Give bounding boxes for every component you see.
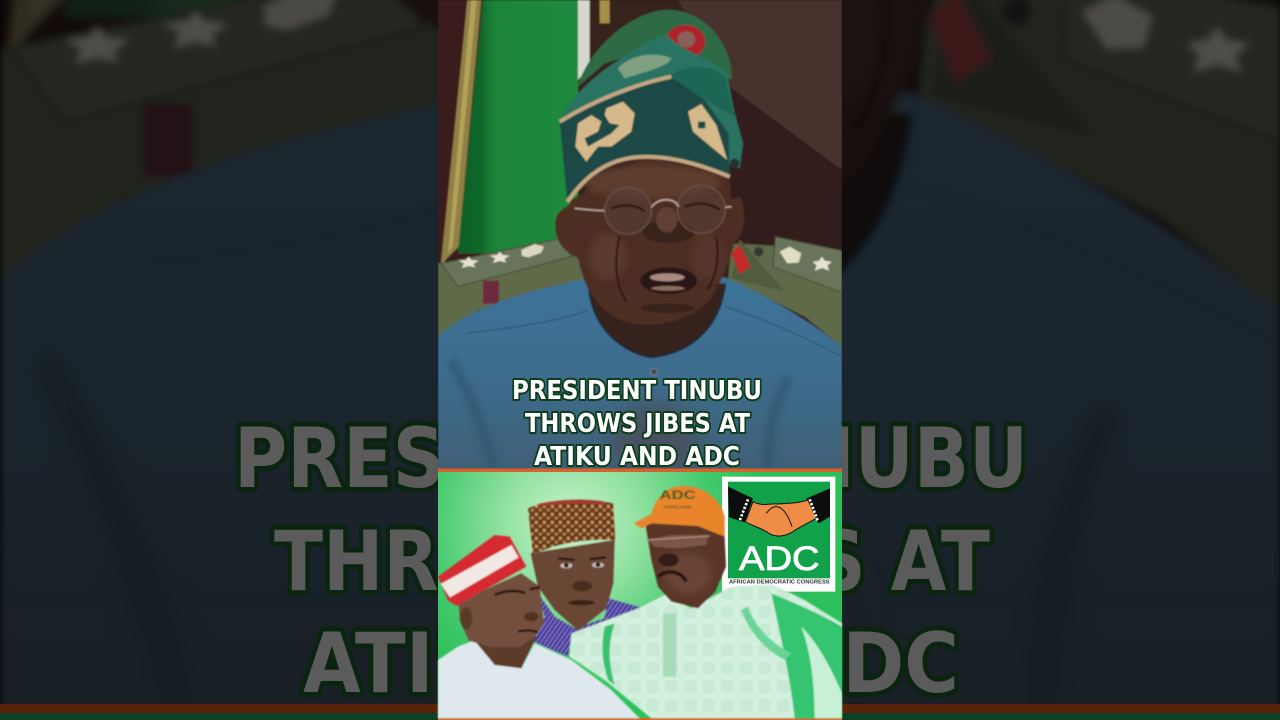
panel: opposition politicians on green background	[438, 468, 842, 720]
politician: centre figure with embroidered cap	[528, 500, 641, 657]
logo: African Democratic Congress handshake emblem: ADC	[739, 540, 820, 578]
logo: African Democratic Congress handshake emblem: AFRICAN DEMOCRATIC CONGRESS	[729, 579, 830, 585]
politician: man in red and white cap with white robe	[438, 535, 640, 718]
backdrop enlarged headline	[234, 410, 1028, 712]
panel: president speaking in front of flag and officer uniform	[438, 0, 842, 477]
headline caption: ATIKU AND ADC	[534, 442, 740, 472]
backdrop enlarged headline: ATIKU AND ADC	[303, 615, 959, 712]
backdrop enlarged headline: THROWS JIBES AT	[274, 513, 990, 610]
politician: man in orange ADC cap and green agbada	[570, 486, 842, 718]
headline caption: PRESIDENT TINUBU	[512, 376, 762, 406]
headline caption: THROWS JIBES AT	[525, 409, 750, 439]
politician: man in orange ADC cap and green agbada: ADC	[660, 488, 696, 502]
backdrop accent line and green strip	[0, 704, 1280, 720]
logo: African Democratic Congress handshake emblem	[722, 477, 835, 592]
politician: man in orange ADC cap and green agbada: AFRICANS	[663, 504, 691, 509]
backdrop enlarged headline: PRESIDENT TINUBU	[234, 410, 1028, 507]
headline caption	[512, 376, 762, 472]
